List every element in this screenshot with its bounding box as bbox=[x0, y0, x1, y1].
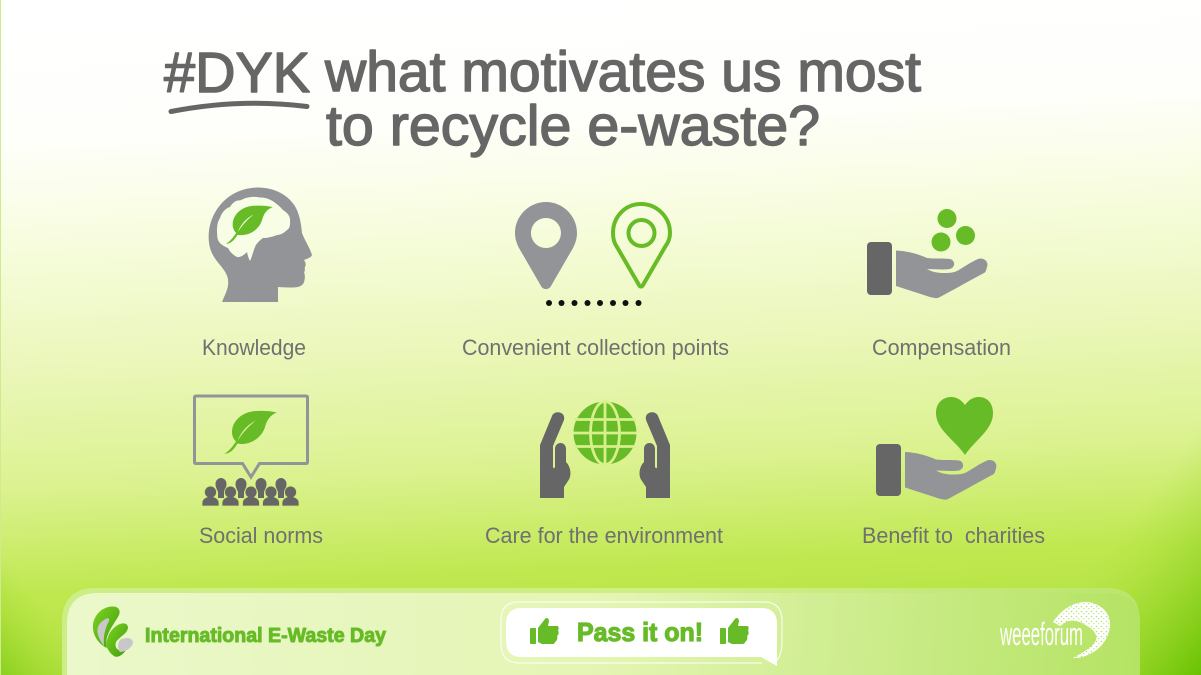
icon: left hand bbox=[540, 412, 570, 498]
panel: social norms bbox=[194, 396, 323, 548]
footer band bbox=[62, 588, 1140, 675]
label: Benefit to charities bbox=[862, 523, 1045, 548]
logo: International E-Waste Day bbox=[93, 606, 387, 657]
panel: benefit to charities bbox=[862, 397, 1045, 548]
panel: compensation bbox=[867, 209, 1011, 360]
label: Care for the environment bbox=[485, 523, 723, 548]
icon: green pin bbox=[613, 204, 670, 286]
panel: care for the environment bbox=[485, 402, 723, 548]
label: Social norms bbox=[199, 523, 323, 548]
icon: hand with heart bbox=[876, 397, 996, 500]
icon: thumbs up bbox=[720, 618, 749, 644]
title bbox=[164, 40, 921, 158]
hashtag DYK: #DYK bbox=[164, 41, 310, 105]
icon: hand with coins bbox=[867, 209, 987, 298]
label: Knowledge bbox=[202, 335, 306, 360]
icon: speech bubble bbox=[194, 396, 308, 477]
footer panel bbox=[67, 593, 1140, 675]
icon: audience bbox=[202, 478, 299, 506]
title line 2: to recycle e-waste? bbox=[326, 94, 820, 158]
logo: weeeforum bbox=[999, 602, 1110, 658]
icon: thumbs up bbox=[530, 618, 559, 644]
label: Convenient collection points bbox=[462, 335, 729, 360]
icon: globe bbox=[574, 402, 636, 464]
heading: Pass it on! bbox=[577, 617, 703, 647]
label: International E-Waste Day bbox=[145, 625, 387, 647]
icon: speech bubble with audience bbox=[194, 396, 308, 506]
icon: hands around globe bbox=[540, 402, 670, 498]
icon: head with leaf bbox=[209, 188, 312, 302]
footer panel outer edge bbox=[62, 588, 1140, 675]
callout: pass it on bbox=[501, 602, 782, 666]
icon: grey pin bbox=[515, 202, 577, 289]
icon: map pins bbox=[515, 202, 670, 306]
title line 1: what motivates us most bbox=[324, 40, 921, 104]
icon: leaf bbox=[226, 206, 273, 244]
icon: swirl bbox=[1053, 602, 1110, 658]
wordmark: weeeforum bbox=[999, 616, 1083, 652]
panel: convenient collection points bbox=[462, 202, 729, 360]
icon: e-waste swirl bbox=[93, 606, 133, 657]
icon: leaf bbox=[224, 411, 277, 454]
panel: knowledge bbox=[202, 188, 312, 360]
icon: right hand bbox=[640, 412, 670, 498]
icon: dotted line bbox=[546, 300, 642, 306]
label: Compensation bbox=[872, 335, 1011, 360]
